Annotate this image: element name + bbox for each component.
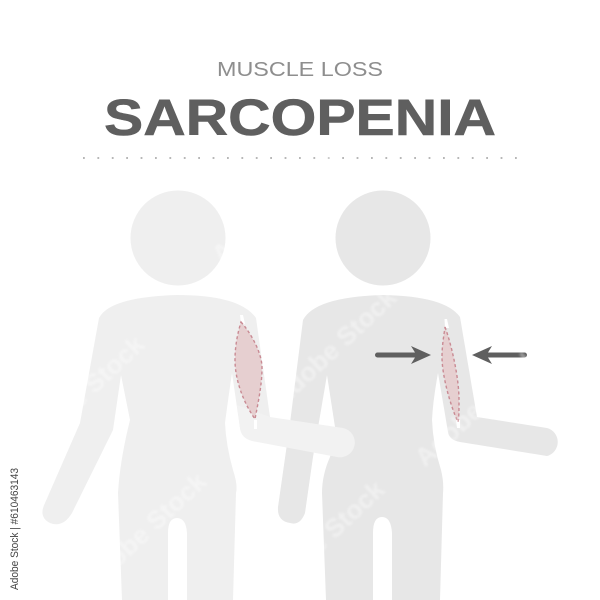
head: [336, 190, 430, 286]
reduced muscle: [442, 327, 459, 422]
watermark: Adobe Stock: [206, 139, 343, 269]
title: sarcopenia: SARCOPENIA: [104, 89, 496, 146]
figure: reduced muscle person: [278, 190, 558, 600]
watermark: Adobe Stock: [266, 282, 403, 412]
arrow: left pointing right: [375, 346, 431, 364]
head: [130, 190, 226, 286]
watermark: Adobe Stock: [409, 342, 546, 472]
body: [278, 295, 558, 600]
watermark: Adobe Stock: [76, 466, 213, 596]
muscle: [235, 322, 262, 419]
armpit slit: [240, 315, 257, 429]
armpit slit: [444, 319, 460, 428]
watermark: [14, 139, 546, 600]
watermark: Adobe Stock: [14, 329, 151, 459]
figure: normal muscle person: [42, 190, 355, 600]
arrow: right pointing left: [472, 346, 527, 364]
body: [42, 295, 270, 600]
source credit: Adobe Stock | #610463143: [9, 468, 21, 590]
forearm: [237, 405, 355, 457]
subtitle: muscle loss: MUSCLE LOSS: [217, 58, 383, 81]
